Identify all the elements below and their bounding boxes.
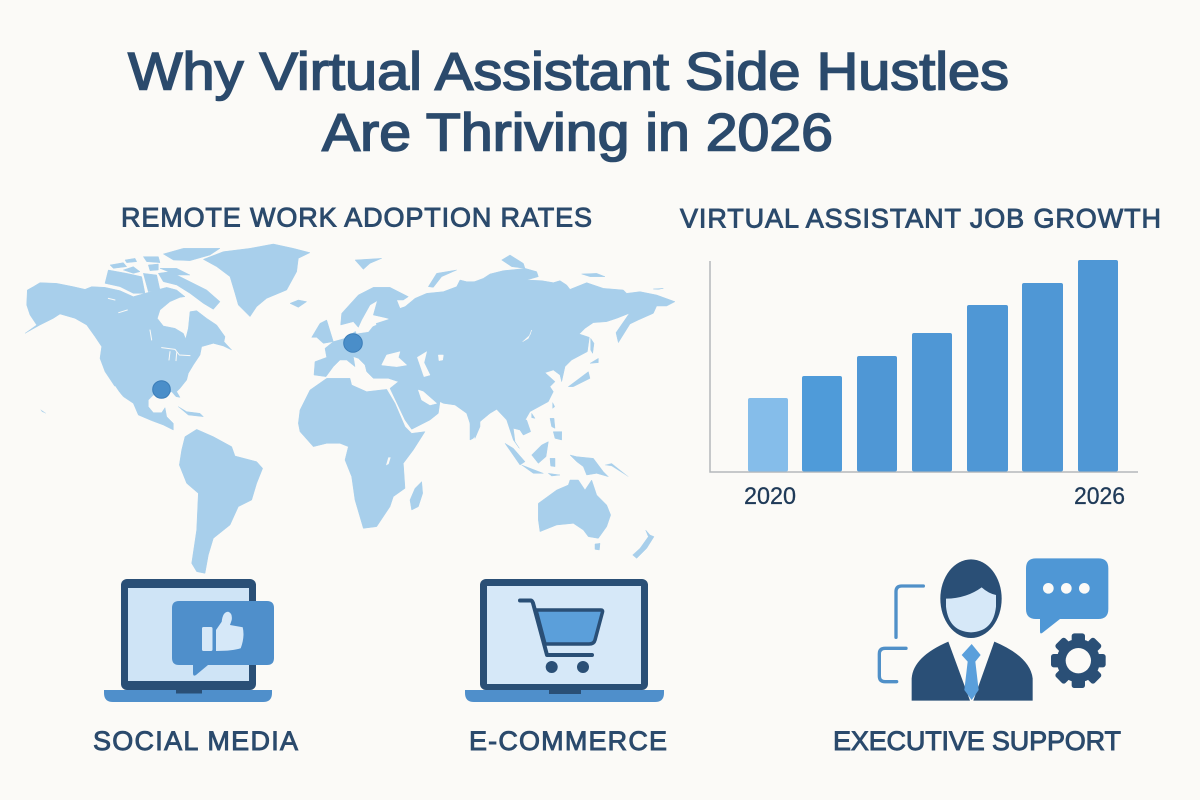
bar: 2022 xyxy=(857,356,897,472)
label: social media: SOCIAL MEDIA xyxy=(93,726,298,756)
map: Europe and West Asia xyxy=(290,258,480,438)
label: e-commerce: E-COMMERCE xyxy=(469,726,667,756)
person xyxy=(912,559,1033,701)
icon: laptop with thumbs up xyxy=(104,579,274,702)
panel: executive support xyxy=(833,558,1121,756)
title: Are Thriving in 2026 xyxy=(322,104,833,162)
icon: laptop with shopping cart xyxy=(465,579,664,702)
map: North America xyxy=(25,248,232,430)
bar: 2020 xyxy=(748,398,788,472)
world map xyxy=(25,244,675,573)
icon: executive with chat bubble and gear xyxy=(879,558,1108,701)
map marker: North America xyxy=(153,381,170,398)
heading: virtual assistant job growth: VIRTUAL ASSISTANT JOB GROWTH xyxy=(680,204,1161,234)
bar chart xyxy=(710,260,1138,510)
map: Southeast Asia and Oceania xyxy=(505,420,654,558)
bar: 2026 xyxy=(1078,260,1118,472)
panel: e-commerce xyxy=(465,579,667,756)
title xyxy=(128,42,1009,162)
bar: 2025 xyxy=(1022,283,1063,472)
axis label: 2026: 2026 xyxy=(1074,483,1125,510)
axis label: 2020: 2020 xyxy=(744,483,796,510)
map marker: Europe xyxy=(344,334,362,352)
brackets xyxy=(879,586,923,682)
heading: remote work adoption rates: REMOTE WORK ADOPTION RATES xyxy=(121,202,592,232)
title: Why Virtual Assistant Side Hustles xyxy=(128,42,1009,102)
chat bubble xyxy=(1026,558,1108,633)
bar: 2023 xyxy=(912,333,952,472)
panel: virtual assistant job growth xyxy=(680,204,1161,510)
label: executive support: EXECUTIVE SUPPORT xyxy=(833,726,1121,756)
map: Greenland and South America xyxy=(179,244,310,573)
bar: 2021 xyxy=(802,376,842,472)
panel: social media xyxy=(93,579,298,756)
map: Africa and Madagascar xyxy=(298,378,425,528)
gear xyxy=(1051,633,1106,688)
map: East Asia xyxy=(470,255,675,440)
bar: 2024 xyxy=(967,305,1008,472)
panel: remote work adoption map xyxy=(25,202,675,573)
